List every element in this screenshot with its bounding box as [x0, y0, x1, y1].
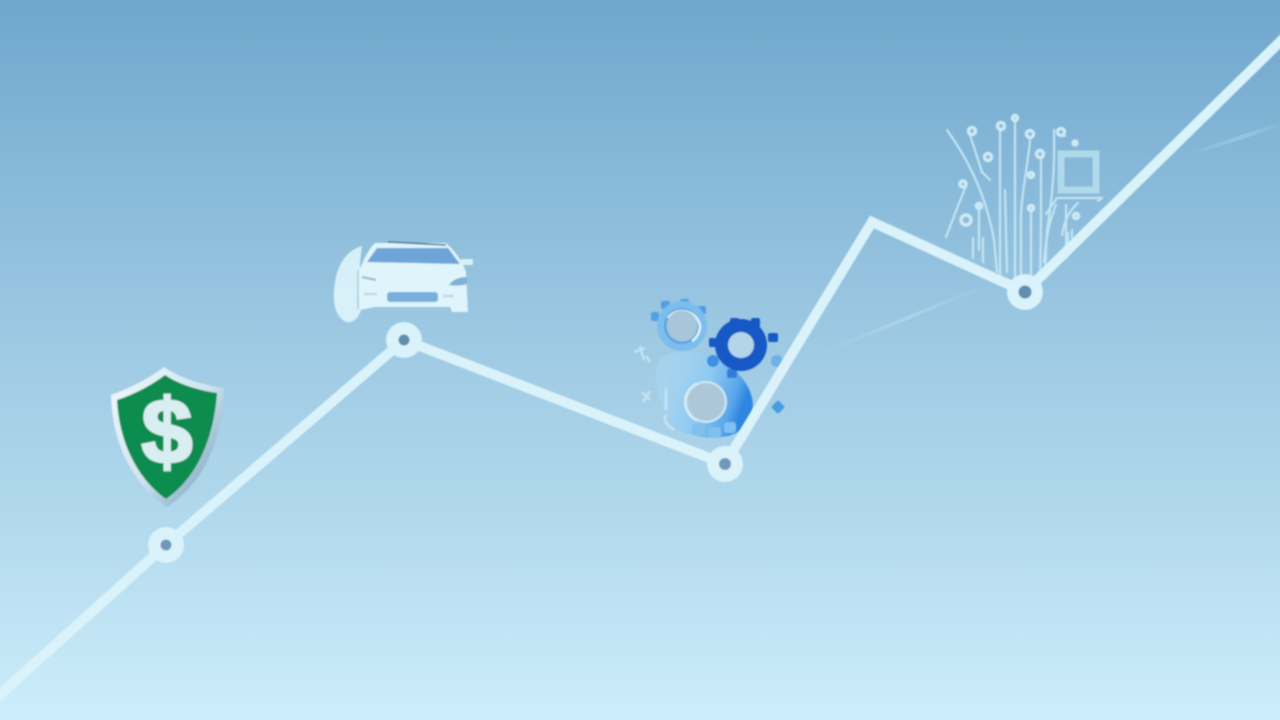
circuit traces — [946, 122, 1078, 282]
gear: light blue top left — [651, 299, 707, 351]
faint light streaks — [810, 122, 1280, 358]
chip square — [1046, 154, 1102, 214]
headlight — [449, 277, 467, 286]
dollar sign: $ — [141, 381, 193, 483]
windshield — [367, 248, 460, 264]
door seam — [357, 270, 359, 309]
car body — [358, 243, 468, 312]
fog lights — [364, 294, 454, 296]
icon: gears — [634, 299, 785, 438]
node 3 — [707, 446, 743, 482]
node 2 — [386, 322, 422, 358]
icon: circuit chip — [946, 116, 1102, 282]
headlight left — [362, 277, 376, 280]
faint formula scribbles — [634, 346, 674, 430]
open door ghost — [334, 246, 362, 322]
roof edge — [388, 242, 446, 245]
circuit nodes — [960, 116, 1078, 225]
gear: large pale blue — [656, 352, 753, 438]
mirror — [461, 259, 473, 265]
icon: dollar shield — [111, 367, 224, 507]
grille — [387, 292, 438, 302]
node 4 — [1007, 274, 1043, 310]
gear: dark blue — [707, 318, 783, 378]
node 1 — [148, 527, 184, 563]
icon: car — [334, 242, 473, 322]
chart nodes — [148, 274, 1043, 563]
small tooth right of line — [771, 400, 785, 414]
